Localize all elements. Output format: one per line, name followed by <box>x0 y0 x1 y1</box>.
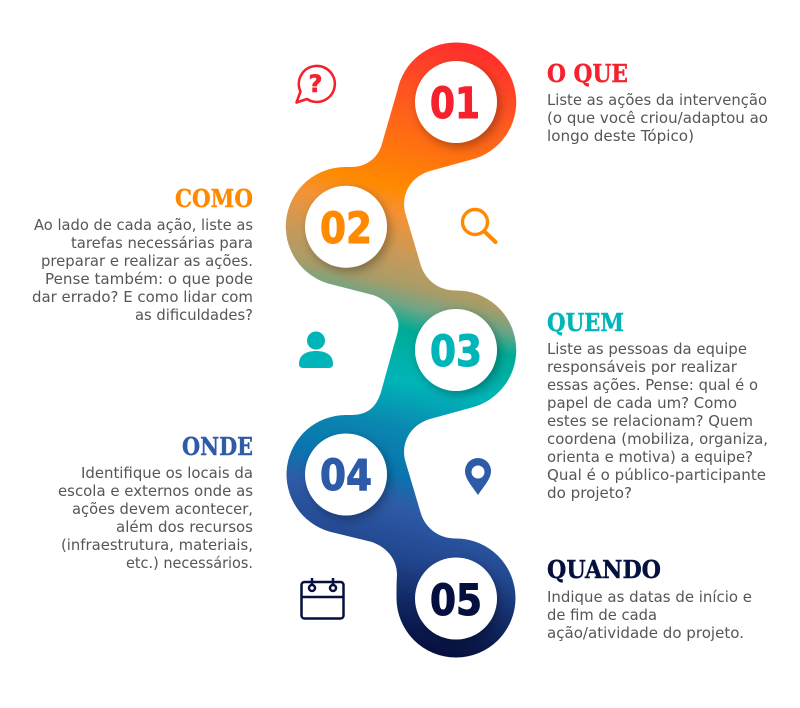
step 05 badge <box>415 558 497 640</box>
text block: QUEM: estes se relacionam? Quem <box>547 412 753 430</box>
text block: QUEM: do projeto? <box>547 484 632 502</box>
text block: QUEM: coordena (mobiliza, organiza, <box>547 430 768 448</box>
step 04 badge <box>305 434 387 516</box>
icon: question speech bubble <box>296 66 335 102</box>
step 03 badge: 03 <box>430 327 482 377</box>
icon: location pin <box>465 458 491 495</box>
text block: QUANDO: Indique as datas de início e <box>547 588 752 606</box>
text block: ONDE: etc.) necessários. <box>126 554 253 572</box>
winding gradient ribbon <box>286 42 516 658</box>
step 01 badge <box>415 61 497 143</box>
icon: question speech bubble: ? <box>309 70 322 98</box>
text block: COMO: tarefas necessárias para <box>71 234 253 252</box>
text block: ONDE: ONDE <box>182 432 253 461</box>
text block: QUANDO: ação/atividade do projeto. <box>547 624 744 642</box>
step 02 badge: 02 <box>320 204 372 254</box>
step 01 badge: 01 <box>430 79 480 129</box>
text block: QUANDO: de fim de cada <box>547 606 657 624</box>
text block: COMO: as dificuldades? <box>135 306 253 324</box>
text block: ONDE: Identifique os locais da <box>81 464 253 482</box>
text block: COMO <box>32 184 253 324</box>
text block: O QUE <box>547 59 768 145</box>
text block: QUEM: Liste as pessoas da equipe <box>547 340 747 358</box>
text block: ONDE: escola e externos onde as <box>58 482 253 500</box>
step 02 badge <box>305 186 387 268</box>
step 04 badge: 04 <box>320 451 372 501</box>
text block: O QUE: Liste as ações da intervenção <box>547 91 767 109</box>
text block: O QUE: (o que você criou/adaptou ao <box>547 109 768 127</box>
text block: QUEM: responsáveis por realizar <box>547 358 738 376</box>
step 05 badge: 05 <box>430 576 482 626</box>
text block: COMO: Ao lado de cada ação, liste as <box>34 216 253 234</box>
text block: COMO: preparar e realizar as ações. <box>41 252 253 270</box>
text block: O QUE: O QUE <box>547 59 628 88</box>
text block: ONDE: ações devem acontecer, <box>72 500 253 518</box>
text block: COMO: Pense também: o que pode <box>45 270 253 288</box>
text block: QUEM: papel de cada um? Como <box>547 394 737 412</box>
icon: calendar <box>302 578 344 618</box>
icon: magnifying glass <box>462 210 496 242</box>
text block: ONDE: além dos recursos <box>116 518 253 536</box>
text block: QUEM: essas ações. Pense: qual é o <box>547 376 758 394</box>
step 03 badge <box>415 309 497 391</box>
text block: COMO: dar errado? E como lidar com <box>32 288 253 306</box>
text block: QUEM <box>547 308 768 502</box>
text block: QUANDO <box>547 555 752 642</box>
text block: QUEM: Qual é o público-participante <box>547 466 766 484</box>
text block: QUEM: orienta e motiva) a equipe? <box>547 448 753 466</box>
text block: COMO: COMO <box>175 184 253 213</box>
text block: QUEM: QUEM <box>547 308 624 337</box>
icon: person <box>299 332 333 368</box>
text block: QUANDO: QUANDO <box>547 555 661 584</box>
text block: ONDE: (infraestrutura, materiais, <box>61 536 253 554</box>
text block: ONDE <box>58 432 253 572</box>
text block: O QUE: longo deste Tópico) <box>547 127 694 145</box>
